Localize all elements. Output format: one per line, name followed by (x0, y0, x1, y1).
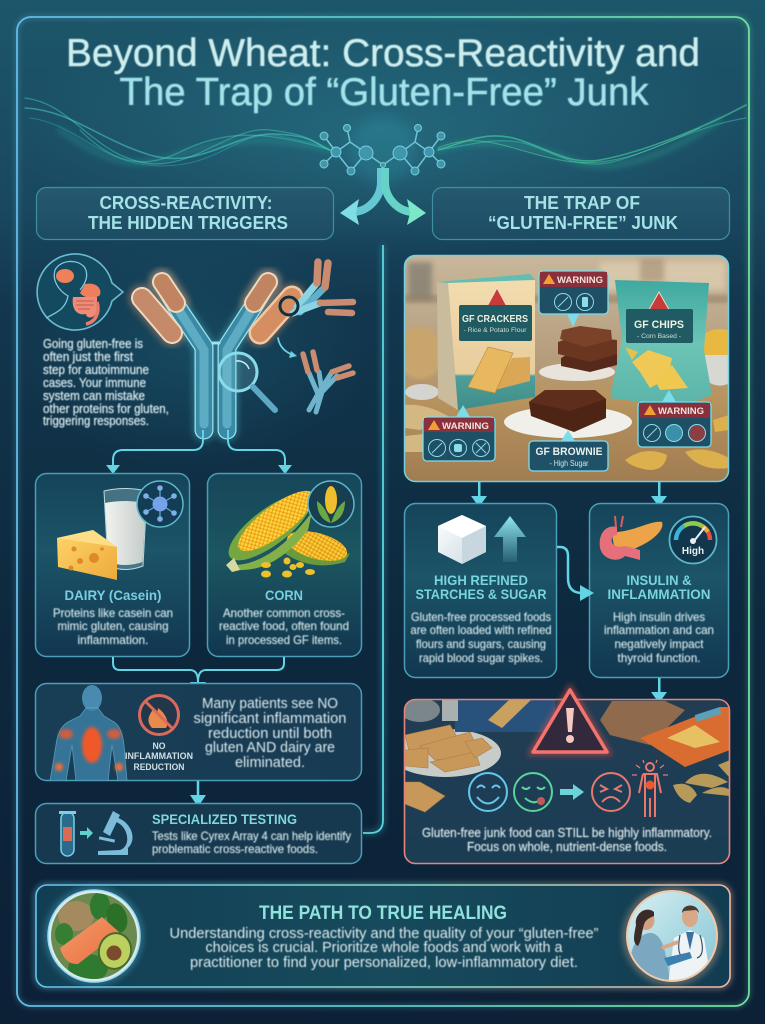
arrow: starches to insulin (557, 547, 594, 601)
right section heading: “GLUTEN-FREE” JUNK (488, 213, 678, 233)
callout: left warning: WARNING (442, 421, 489, 432)
arrows: photo to explanation panels (471, 482, 667, 507)
icon: small arrow (80, 827, 93, 839)
testing text (152, 829, 351, 856)
statement text: gluten AND dairy are (205, 739, 335, 756)
icon: magnifying glass (219, 353, 275, 410)
loose chips (405, 405, 729, 470)
intro text (43, 336, 169, 428)
dairy text: Proteins like casein can (53, 606, 173, 620)
intro text: triggering responses. (43, 413, 149, 428)
no inflammation caption: NO (152, 741, 166, 751)
insulin heading: INSULIN & (626, 572, 692, 588)
icon: happy face (469, 773, 507, 811)
crackers (495, 357, 530, 390)
icon: wedge of cheese (57, 530, 117, 580)
decorative right wave lines (438, 105, 746, 166)
panel: gluten-free junk food photo (397, 255, 742, 482)
dairy text: mimic gluten, causing (58, 619, 168, 633)
testing text: problematic cross-reactive foods. (152, 842, 318, 856)
corn text (219, 606, 349, 647)
icon: test tube (59, 811, 76, 856)
starches text: are often loaded with refined (410, 623, 552, 637)
connector: testing to right column (363, 245, 383, 833)
left section heading: CROSS-REACTIVITY: (100, 193, 272, 213)
corn heading: CORN (265, 587, 303, 603)
callout: right warning (638, 390, 711, 447)
starches text (410, 610, 552, 665)
starches text: Gluten-free processed foods (411, 610, 551, 624)
starches text: rapid blood sugar spikes. (419, 651, 543, 665)
insulin text: thyroid function. (618, 651, 700, 665)
arrows to dairy and corn (106, 430, 292, 474)
testing text: Tests like Cyrex Array 4 can help identify (152, 829, 351, 843)
callout: GF brownie label: - High Sugar (550, 459, 589, 468)
starches text: flours and sugars, causing (416, 637, 546, 651)
no inflammation caption: REDUCTION (134, 762, 184, 772)
panel: cross-reactivity intro (37, 254, 353, 474)
intro text: other proteins for gluten, (43, 401, 169, 416)
right section heading (432, 188, 730, 240)
background food: loose chips (673, 760, 730, 803)
dairy text (53, 606, 173, 647)
starches heading: STARCHES & SUGAR (416, 586, 546, 602)
icon: brain and gut speech bubble (37, 254, 123, 330)
statement text (194, 695, 346, 771)
arrow: insulin to warning panel (651, 678, 667, 703)
icon: sugar cube (438, 515, 486, 564)
warning panel text (422, 826, 712, 854)
intro text: Going gluten-free is (43, 336, 143, 351)
icon: healthy food plate (44, 886, 144, 986)
title (66, 32, 700, 114)
icon: small bound antibody (280, 262, 353, 315)
insulin text: negatively impact (614, 637, 704, 651)
insulin text: High insulin drives (613, 610, 705, 624)
icon: sad face (592, 773, 630, 811)
chips in bag (632, 350, 672, 388)
icon: corn badge (308, 481, 354, 527)
background food: blue packet (455, 699, 555, 732)
warning panel text: Gluten-free junk food can STILL be highly inflammatory. (422, 826, 712, 840)
healing heading: THE PATH TO TRUE HEALING (259, 903, 507, 924)
panel: junk food still inflammatory (389, 690, 730, 864)
starches heading: HIGH REFINED (434, 572, 528, 588)
insulin heading: INFLAMMATION (608, 586, 710, 602)
panel: high refined starches and sugar (404, 504, 556, 678)
dough bowl (405, 326, 438, 379)
crackers box (437, 282, 458, 410)
no inflammation caption: INFLAMMATION (125, 751, 193, 761)
panel: specialized testing (36, 804, 362, 864)
callout: top warning: WARNING (557, 275, 603, 286)
background plate of brownies (539, 363, 615, 381)
panel: gluten-free junk food photo: GF CHIPS (634, 319, 684, 331)
icon: eating face (514, 773, 552, 811)
statement text: Many patients see NO (202, 695, 338, 712)
right section heading: THE TRAP OF (524, 193, 640, 213)
panel: dairy (36, 474, 190, 656)
panel: gluten-free junk food photo: - Rice & Potato Flour (464, 327, 527, 334)
statement text: eliminated. (235, 754, 305, 771)
panel: the path to true healing (36, 885, 730, 987)
panel: no inflammation reduction (36, 684, 362, 781)
title: The Trap of “Gluten-Free” Junk (120, 71, 649, 114)
molecule icon (320, 116, 445, 184)
corn text: in processed GF items. (226, 633, 342, 647)
no inflammation caption (125, 741, 193, 772)
callout: GF brownie label: GF BROWNIE (536, 446, 602, 458)
icon: patient and practitioner (622, 886, 722, 986)
icon: large antibody (142, 282, 292, 430)
photo frame border (404, 256, 728, 482)
callout: GF brownie label (529, 430, 608, 471)
corn text: reactive food, often found (219, 619, 349, 633)
crackers label (459, 305, 532, 341)
intro text: often just the first (43, 349, 133, 364)
background food: crackers on plate (405, 729, 501, 777)
panel: insulin and inflammation (590, 504, 728, 678)
icon: human body with inflammation (50, 685, 127, 781)
insulin heading (608, 572, 710, 602)
arrow: dairy and corn merge (113, 657, 284, 692)
icon: crossed-out flame (140, 696, 178, 734)
callout: right warning: WARNING (658, 406, 704, 417)
starches heading (416, 572, 546, 602)
left section heading (36, 188, 334, 240)
panel: corn (208, 474, 362, 656)
icon: microscope (98, 811, 133, 855)
warning panel text: Focus on whole, nutrient-dense foods. (467, 840, 667, 854)
chips bowl (704, 329, 728, 355)
icon: corn cobs and kernels (219, 481, 350, 578)
callout: top warning (539, 271, 608, 327)
healing text (170, 925, 598, 971)
callout: left warning (423, 405, 495, 461)
icon: up arrow (494, 516, 526, 562)
left section heading: THE HIDDEN TRIGGERS (88, 213, 288, 233)
split arrows from molecule (340, 168, 426, 225)
decorative left wave lines (25, 98, 330, 166)
intro text: system can mistake (43, 388, 145, 403)
healing text: choices is crucial. Prioritize whole foods and work with a (206, 939, 563, 956)
intro text: step for autoimmune (43, 362, 149, 377)
insulin text: inflammation and can (604, 623, 714, 637)
corn text: Another common cross- (223, 606, 345, 620)
healing text: practitioner to find your personalized, low-inflammatory diet. (190, 954, 578, 971)
statement text: significant inflammation (194, 710, 346, 727)
icon: inflamed person (632, 760, 668, 817)
intro text: cases. Your immune (43, 375, 146, 390)
title: Beyond Wheat: Cross-Reactivity and (66, 32, 700, 75)
dairy text: inflammation. (78, 633, 148, 647)
panel: gluten-free junk food photo: - Corn Based - (637, 333, 681, 340)
dairy heading: DAIRY (Casein) (64, 587, 162, 603)
icon: high gauge: High (682, 546, 704, 557)
large brownie on plate (504, 406, 632, 438)
chips bag (610, 280, 712, 407)
panel: gluten-free junk food photo: GF CRACKERS (462, 314, 528, 325)
healing text: Understanding cross-reactivity and the quality of your “gluten-free” (170, 925, 598, 942)
icon: glass of milk (104, 488, 147, 570)
warning triangle (488, 288, 506, 305)
icon: casein protein badge (137, 481, 183, 527)
background food: wrapper and orange chips bag (600, 701, 685, 745)
icon: high gauge (670, 516, 716, 564)
arrow: to specialized testing (190, 781, 206, 807)
insulin text (604, 610, 714, 665)
statement text: reduction until both (208, 725, 332, 742)
icon: glowing warning triangle (533, 690, 607, 752)
icon: pancreas (600, 516, 662, 560)
icon: detached antibody with arrow (278, 338, 353, 412)
testing heading: SPECIALIZED TESTING (152, 812, 297, 827)
icon: arrow between faces (560, 784, 584, 800)
